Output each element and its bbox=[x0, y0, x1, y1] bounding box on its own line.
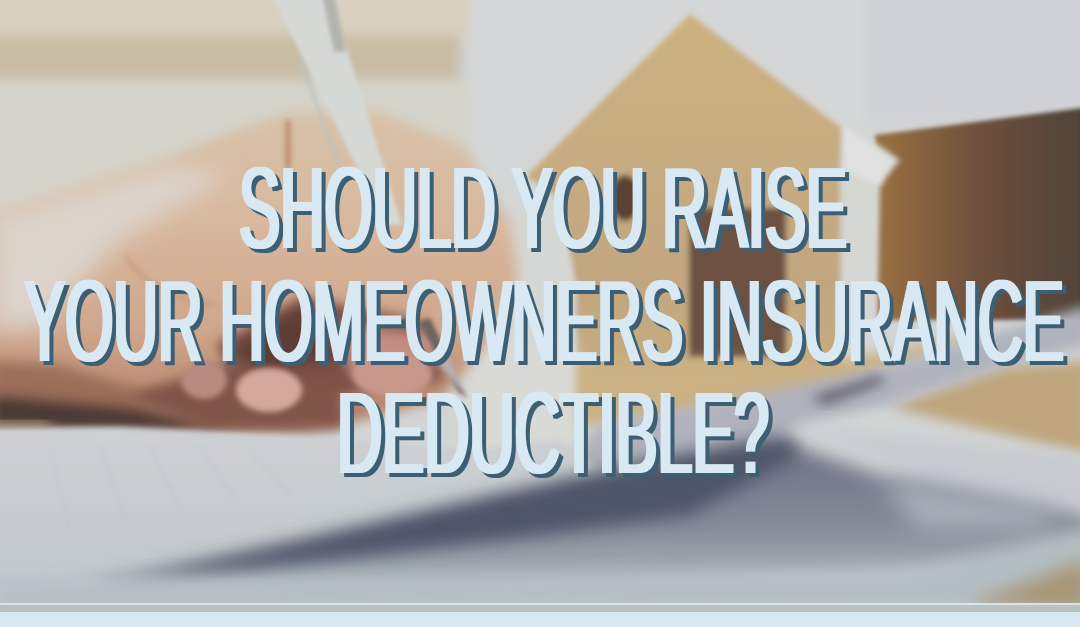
paper fold shadow bbox=[70, 435, 800, 590]
brown box right bbox=[875, 107, 1080, 320]
fingers and nail bbox=[181, 353, 432, 412]
hand bbox=[0, 112, 518, 428]
table bbox=[572, 330, 1080, 455]
bottom band bbox=[0, 528, 1080, 610]
white area below hand bbox=[564, 339, 582, 428]
window shelf top left bbox=[0, 0, 471, 202]
title bbox=[24, 143, 1064, 498]
upper paper band bbox=[560, 305, 1080, 470]
pen bbox=[272, 0, 402, 225]
bottom strip bbox=[0, 603, 1080, 627]
paper right white wedge bbox=[851, 438, 1080, 498]
light patch on lower paper bbox=[880, 480, 1060, 530]
ruled paper lines bbox=[50, 445, 290, 530]
lower paper bbox=[150, 445, 1080, 590]
table strip left bbox=[0, 421, 50, 428]
paper left bbox=[0, 427, 600, 590]
model house bbox=[526, 12, 902, 370]
thumb crease bbox=[125, 120, 288, 305]
finger gap dark area bbox=[130, 297, 445, 428]
pale upper-left of hand bbox=[0, 165, 230, 330]
